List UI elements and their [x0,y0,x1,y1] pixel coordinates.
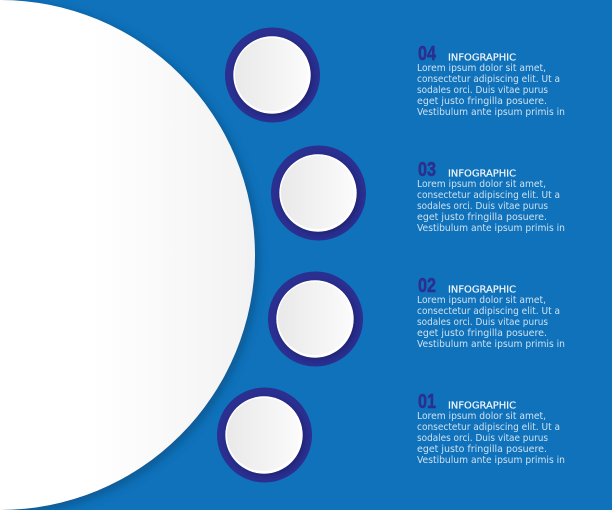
text block 04: consectetur adipiscing elit. Ut a [417,74,560,85]
text block 04: 04 [418,43,437,65]
text block 04: INFOGRAPHIC [448,52,516,64]
text block 02 [417,275,565,350]
text block 01: Vestibulum ante ipsum primis in [417,455,565,466]
text block 02: eget justo fringilla posuere. [417,328,547,339]
text block 01: INFOGRAPHIC [448,400,516,412]
text block 03: sodales orci. Duis vitae purus [417,201,548,212]
text block 04: sodales orci. Duis vitae purus [417,85,548,96]
text block 03: consectetur adipiscing elit. Ut a [417,190,560,201]
circle 01 [217,388,312,482]
text block 04 [417,43,565,118]
text block 04: Vestibulum ante ipsum primis in [417,107,565,118]
text block 01: 01 [418,391,436,413]
text block 02: sodales orci. Duis vitae purus [417,317,548,328]
text block 01: consectetur adipiscing elit. Ut a [417,422,560,433]
text block 03: 03 [418,159,436,181]
text block 02: INFOGRAPHIC [448,284,516,296]
text block 02: 02 [418,275,436,297]
circle 04 [225,28,320,122]
text block 03: Lorem ipsum dolor sit amet, [417,179,546,190]
text block 03 [417,159,565,234]
text block 01: sodales orci. Duis vitae purus [417,433,548,444]
text block 02: Vestibulum ante ipsum primis in [417,339,565,350]
text block 03: INFOGRAPHIC [448,168,516,180]
circle 03 [271,146,366,240]
text block 01 [417,391,565,466]
text block 01: Lorem ipsum dolor sit amet, [417,411,546,422]
text block 04: eget justo fringilla posuere. [417,96,547,107]
text block 02: Lorem ipsum dolor sit amet, [417,295,546,306]
text block 03: eget justo fringilla posuere. [417,212,547,223]
text block 03: Vestibulum ante ipsum primis in [417,223,565,234]
text block 04: Lorem ipsum dolor sit amet, [417,63,546,74]
text block 01: eget justo fringilla posuere. [417,444,547,455]
circle 02 [268,272,363,366]
text block 02: consectetur adipiscing elit. Ut a [417,306,560,317]
big white semicircle [0,0,258,510]
